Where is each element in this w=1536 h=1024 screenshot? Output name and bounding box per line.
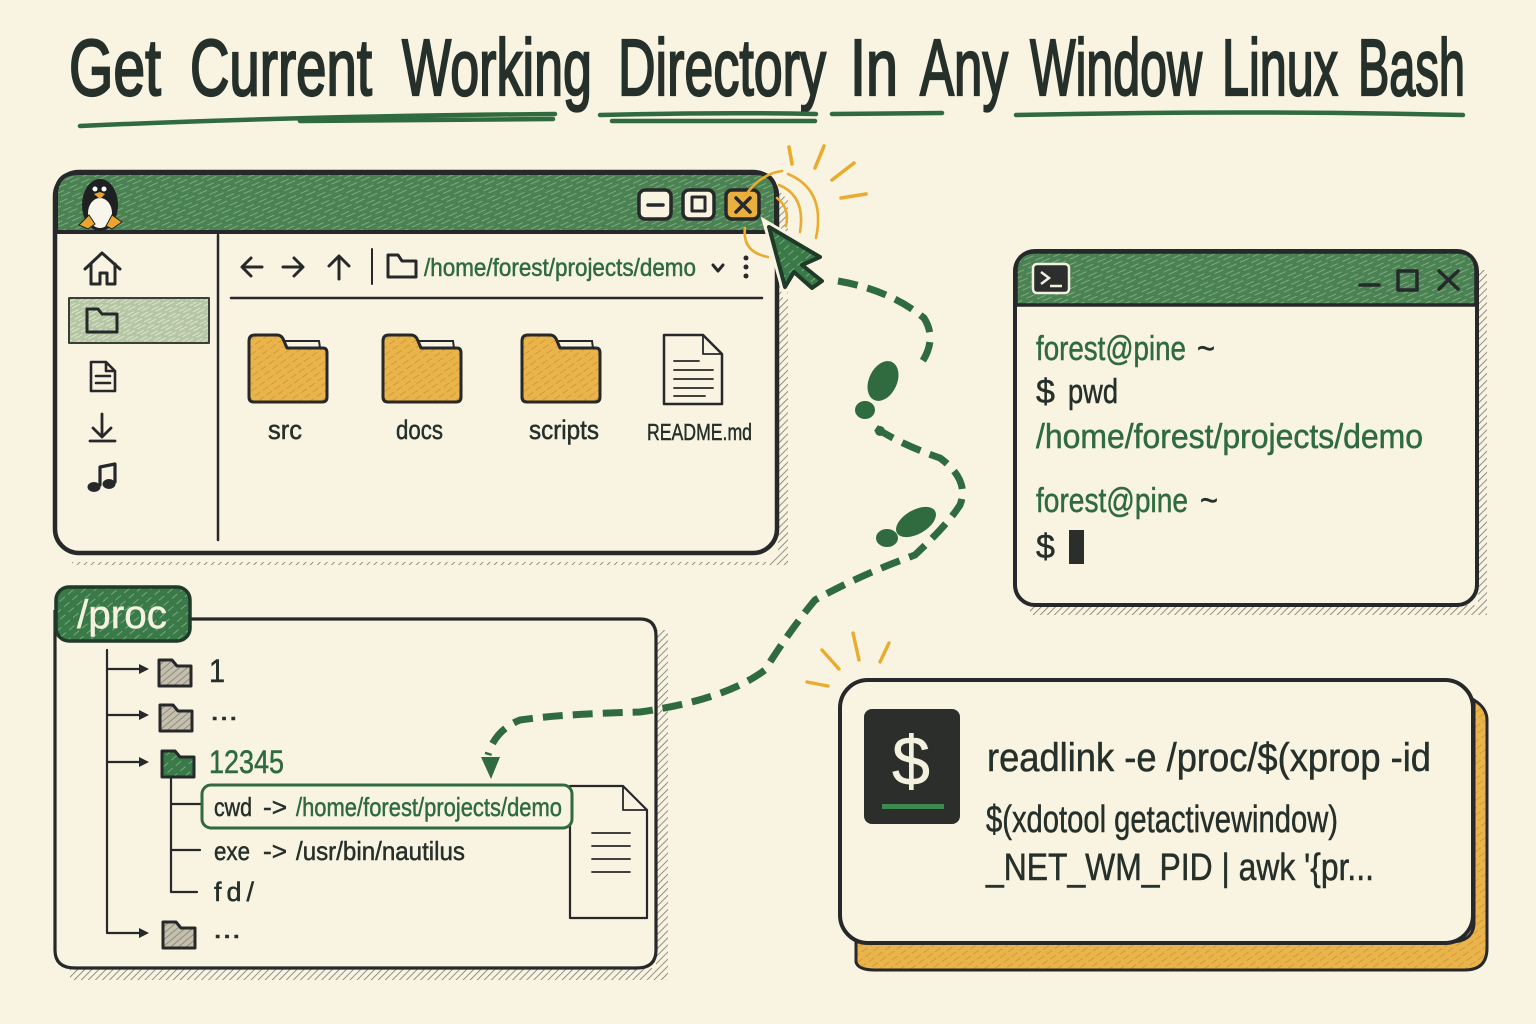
panel: command card (840, 680, 1487, 970)
row: fd: fd/ (214, 877, 254, 907)
row: 1: 1 (209, 653, 225, 689)
title: Directory (618, 23, 826, 112)
terminal buttons (1360, 271, 1458, 290)
file: README.md (647, 335, 752, 445)
terminal text: ~ (1197, 330, 1215, 368)
row: 1 (159, 653, 225, 689)
icon: up arrow (329, 256, 349, 279)
proc shadow (70, 630, 668, 980)
icon: prompt (1033, 264, 1069, 293)
command text: _NET_WM_PID | awk '{pr... (985, 847, 1374, 889)
terminal title bar (1016, 252, 1476, 305)
window body (55, 172, 777, 553)
folder: src (249, 335, 327, 445)
sidebar divider (217, 235, 219, 540)
icon: path folder (388, 255, 416, 277)
folder: scripts (522, 335, 600, 445)
spark marks (807, 633, 889, 686)
icon: document (91, 362, 115, 391)
icon: music (100, 464, 115, 485)
folder: docs (383, 335, 461, 445)
title: Bash (1358, 23, 1465, 112)
command text: readlink -e /proc/$(xprop -id (987, 736, 1431, 780)
title underline (80, 112, 1463, 126)
terminal shadow (1030, 270, 1487, 615)
title: Linux (1222, 23, 1338, 112)
terminal body (1015, 251, 1477, 605)
title bar (56, 173, 776, 232)
icon: download (90, 414, 115, 441)
cwd highlight (202, 785, 572, 828)
proc tab: /proc (77, 593, 167, 637)
proc tab (56, 587, 190, 641)
cwd highlight: -> (263, 792, 287, 822)
icon: footprint upper (855, 356, 905, 436)
panel: /proc tree (55, 587, 668, 980)
terminal text (1036, 330, 1423, 566)
icon: arrow head to cwd (481, 757, 500, 779)
row: exe: -> (263, 836, 287, 866)
music notes (88, 479, 116, 492)
sidebar active item (69, 298, 209, 343)
terminal text: forest@pine (1036, 330, 1186, 368)
panel: terminal window (1015, 251, 1487, 615)
row: exe: /usr/bin/nautilus (296, 836, 465, 866)
icon: cursor arrow (768, 226, 822, 289)
title: Get (69, 23, 161, 112)
terminal text: forest@pine (1036, 482, 1188, 520)
cwd highlight: /home/forest/projects/demo (296, 792, 562, 822)
folder: docs: docs (396, 415, 443, 445)
icon: folder (87, 309, 117, 332)
title: Any (920, 23, 1008, 112)
sidebar icons (69, 253, 209, 485)
icon: back arrow (242, 258, 262, 276)
icon: forward arrow (283, 258, 303, 276)
icon: linux penguin (79, 179, 122, 231)
tree lines (107, 650, 200, 933)
row: 12345 (162, 744, 284, 780)
row: ellipsis (160, 695, 238, 731)
icon: chevron (713, 265, 723, 271)
command text: $(xdotool getactivewindow) (986, 799, 1338, 841)
terminal text: pwd (1068, 373, 1118, 411)
terminal text: $ (1036, 528, 1055, 566)
cwd highlight: cwd (214, 792, 252, 822)
title: Working (402, 23, 592, 112)
panel: file manager window (55, 172, 788, 565)
icon: menu dots (744, 256, 748, 278)
row: exe: exe (214, 836, 250, 866)
row: ellipsis: ... (210, 695, 238, 726)
path text: /home/forest/projects/demo (424, 254, 696, 282)
window buttons (639, 190, 759, 219)
dashed footprint path (488, 281, 962, 755)
row: 12345: 12345 (209, 744, 284, 780)
command text (985, 736, 1431, 889)
window shadow (72, 190, 788, 565)
card backing (856, 700, 1487, 970)
icon: footprint lower (876, 501, 941, 547)
row: last ellipsis: ... (213, 913, 241, 944)
title: Window (1030, 23, 1202, 112)
icon: home (85, 253, 120, 284)
card body (840, 680, 1473, 943)
file: README.md: README.md (647, 419, 752, 445)
folder: src: src (268, 415, 302, 445)
icon: dollar badge: $ (892, 722, 930, 800)
title: Current (190, 23, 372, 112)
icon: dollar badge (864, 709, 960, 824)
document behind (570, 786, 647, 918)
proc body (55, 610, 656, 968)
row: exe (214, 836, 465, 866)
click ripple (745, 146, 866, 257)
terminal text: $ (1036, 373, 1055, 411)
row: last ellipsis (163, 913, 241, 948)
terminal cursor (1069, 530, 1084, 564)
terminal text: /home/forest/projects/demo (1036, 418, 1423, 456)
title: In (850, 23, 898, 112)
toolbar (231, 249, 762, 298)
folder: scripts: scripts (529, 415, 599, 445)
terminal text: ~ (1200, 482, 1218, 520)
title (69, 23, 1465, 112)
